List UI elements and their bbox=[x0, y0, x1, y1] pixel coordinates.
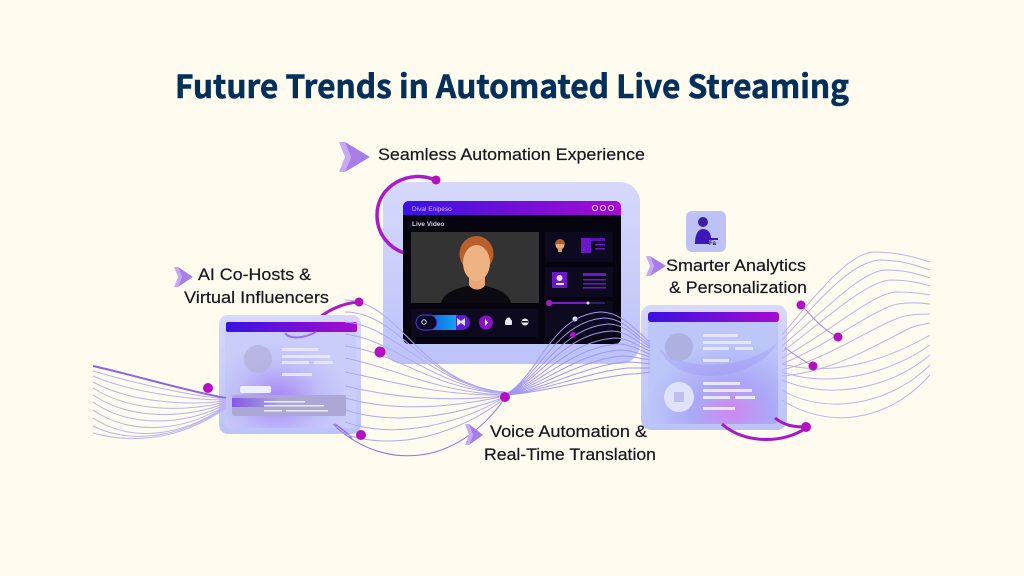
left wave bundle bbox=[93, 366, 226, 439]
arrow: AI co-hosts bbox=[174, 267, 193, 287]
live video label: Live Video bbox=[412, 221, 444, 228]
icon: analyst badge: Fa bbox=[709, 241, 717, 247]
lower arcs bbox=[722, 418, 806, 440]
arc accent top left bbox=[377, 177, 435, 253]
middle-left wave bundle bbox=[333, 300, 505, 456]
inner purple swoosh bbox=[285, 332, 316, 337]
label: voice automation bbox=[484, 422, 656, 464]
label: smarter analytics: & Personalization bbox=[669, 278, 807, 297]
title: Future Trends in Automated Live Streaming bbox=[175, 62, 849, 108]
strip purple glow bbox=[232, 398, 282, 407]
card body glow bbox=[648, 318, 778, 424]
panel: right card bbox=[641, 305, 811, 440]
label: AI co-hosts: AI Co-Hosts & bbox=[198, 265, 312, 284]
panel: left card bbox=[219, 302, 361, 438]
lower lines bbox=[703, 382, 755, 410]
side panel: slider bbox=[545, 300, 613, 337]
right wave bundle bbox=[782, 252, 930, 418]
outer glass frame bbox=[383, 182, 640, 364]
white pill bbox=[240, 386, 271, 393]
grey strip bbox=[232, 395, 346, 416]
title bar bbox=[648, 312, 779, 322]
node dots bbox=[203, 298, 842, 440]
side panel: contact list bbox=[545, 267, 613, 297]
arrow: voice automation bbox=[465, 424, 483, 445]
middle-right wave bundle bbox=[505, 312, 650, 395]
panel: central streaming window bbox=[377, 176, 640, 364]
arc dot bbox=[432, 176, 440, 184]
dark window bbox=[403, 201, 621, 344]
title bar bbox=[226, 322, 357, 332]
card body glow bbox=[225, 325, 356, 428]
control bar bbox=[411, 309, 538, 337]
glass frame bbox=[641, 305, 787, 430]
label: seamless automation: Seamless Automation Experience bbox=[378, 145, 645, 164]
side panel: profile bbox=[545, 232, 613, 262]
label: smarter analytics: Smarter Analytics bbox=[666, 256, 806, 275]
arrow: seamless automation bbox=[339, 142, 370, 172]
icon: analyst badge bbox=[686, 211, 726, 252]
avatar bbox=[244, 345, 272, 373]
stop square bbox=[674, 392, 684, 402]
lower tail bbox=[335, 424, 352, 438]
avatar bbox=[665, 333, 693, 361]
upper lines bbox=[703, 334, 753, 362]
window controls bbox=[592, 205, 614, 211]
label: AI co-hosts: Virtual Influencers bbox=[184, 288, 329, 307]
label: smarter analytics bbox=[666, 256, 807, 297]
video area with presenter bbox=[411, 232, 539, 303]
window title bar bbox=[403, 201, 621, 215]
arrow: smarter analytics bbox=[646, 256, 666, 276]
label: AI co-hosts bbox=[184, 265, 329, 307]
text lines bbox=[282, 348, 333, 376]
label: voice automation: Real-Time Translation bbox=[484, 445, 656, 464]
top arc bbox=[314, 302, 359, 322]
window title text: Dival Enipeso bbox=[412, 206, 452, 213]
glass frame bbox=[219, 315, 361, 434]
strip lines bbox=[264, 401, 328, 412]
arc dot bbox=[801, 422, 811, 432]
stop button bbox=[664, 382, 694, 412]
label: voice automation: Voice Automation & bbox=[490, 422, 648, 441]
swoosh bbox=[660, 342, 778, 376]
